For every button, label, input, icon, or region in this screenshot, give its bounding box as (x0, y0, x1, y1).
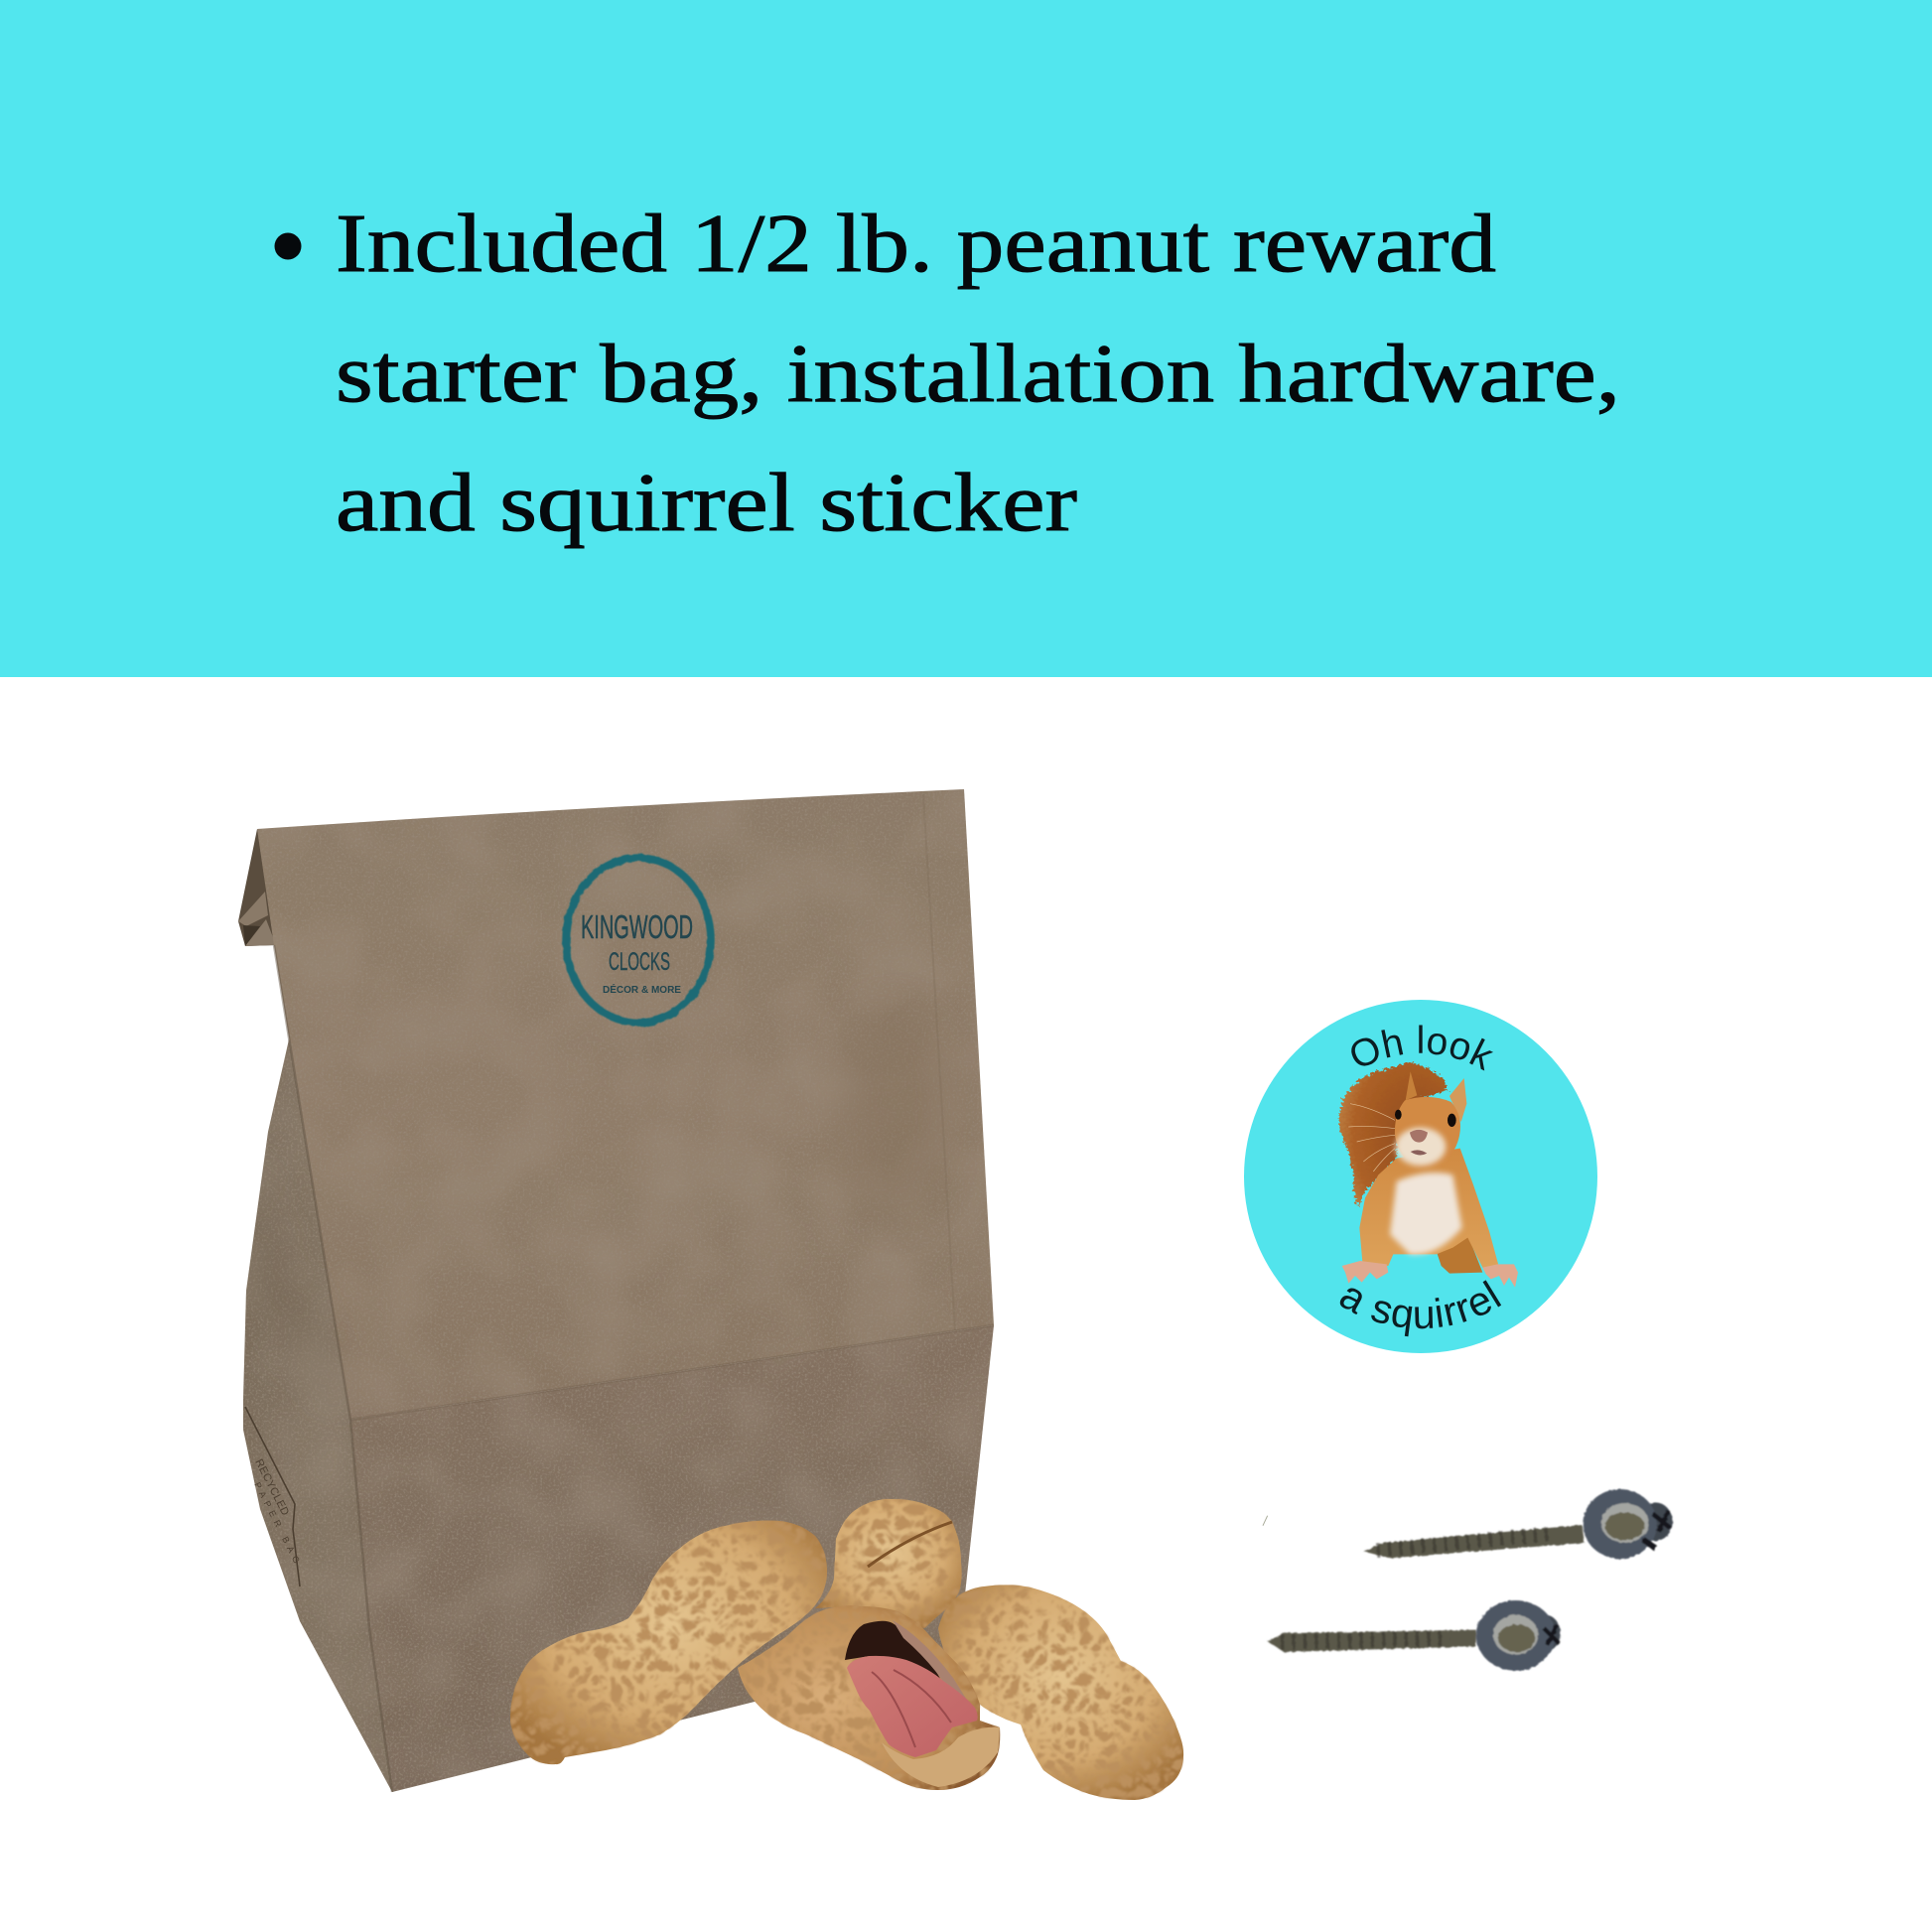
bag top fold (238, 829, 288, 946)
nose and mouth (1410, 1130, 1428, 1143)
sticker text bottom: a squirrel (1340, 1280, 1501, 1336)
bag recycled print: RECYCLED (252, 1457, 291, 1518)
screw: lower (1268, 1600, 1561, 1671)
peanut: front long (510, 1521, 827, 1764)
kernel (847, 1656, 978, 1757)
belly (1390, 1173, 1462, 1255)
small speck (1263, 1516, 1268, 1526)
kernel opening (845, 1621, 948, 1693)
bag stamp logo: CLOCKS (609, 948, 670, 976)
paws (1342, 1261, 1518, 1288)
hind leg (1437, 1234, 1482, 1274)
peanut: back (815, 1499, 962, 1628)
shell lip (882, 1727, 1000, 1787)
bullet text block: starter bag, installation hardware, (336, 328, 1620, 420)
tail (1339, 1062, 1448, 1208)
squirrel sticker (1244, 1000, 1597, 1353)
top banner (0, 0, 1932, 677)
bag recycled print (245, 1407, 302, 1587)
squirrel illustration (1339, 1062, 1518, 1288)
body (1359, 1149, 1499, 1268)
bag stamp logo: KINGWOOD (581, 908, 693, 945)
sticker text top: Oh look (1351, 1025, 1493, 1070)
ears (1406, 1071, 1417, 1100)
peanut: open with kernel (738, 1605, 1000, 1790)
bullet text block: Included 1/2 lb. peanut reward (336, 198, 1496, 290)
bullet text block: and squirrel sticker (336, 457, 1077, 549)
bag recycled print: PAPER BAG (252, 1480, 302, 1565)
bag stamp logo (566, 858, 711, 1023)
head (1395, 1097, 1460, 1169)
bullet text block (274, 198, 1620, 549)
eyes (1395, 1110, 1402, 1120)
peanut: right (938, 1585, 1183, 1800)
peanuts (510, 1499, 1183, 1800)
paper bag (238, 789, 994, 1792)
bag stamp logo: DÉCOR & MORE (603, 983, 681, 996)
screw: upper (1363, 1489, 1673, 1559)
installation screws (1263, 1489, 1673, 1671)
